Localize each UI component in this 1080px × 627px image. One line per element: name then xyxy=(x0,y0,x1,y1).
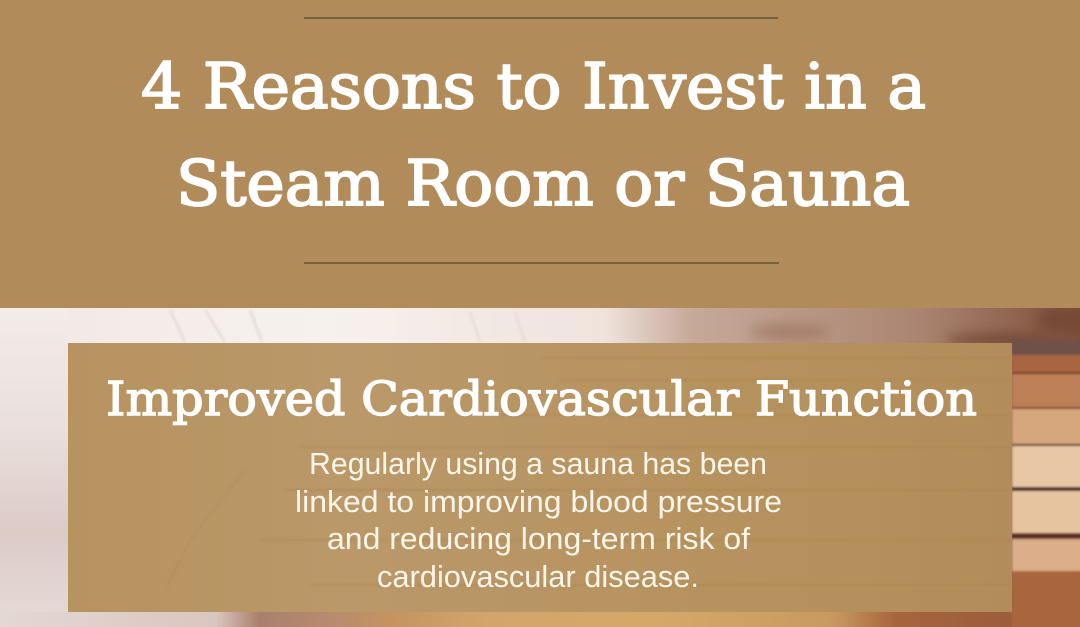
panel: improved cardiovascular function xyxy=(68,343,1012,612)
body text: Regularly using a sauna has been xyxy=(309,446,767,481)
body text: linked to improving blood pressure xyxy=(295,484,782,519)
body text: cardiovascular disease. xyxy=(377,559,699,594)
body text: and reducing long-term risk of xyxy=(327,521,750,556)
title: 4 Reasons to Invest in a xyxy=(141,50,926,123)
title: Steam Room or Sauna xyxy=(176,147,910,220)
heading: Improved Cardiovascular Function xyxy=(106,372,977,427)
photo background: sauna wood and steam xyxy=(0,308,1080,627)
title xyxy=(141,50,926,220)
body text xyxy=(295,446,782,594)
wood planks at right xyxy=(1012,340,1080,627)
header band xyxy=(0,0,1080,308)
